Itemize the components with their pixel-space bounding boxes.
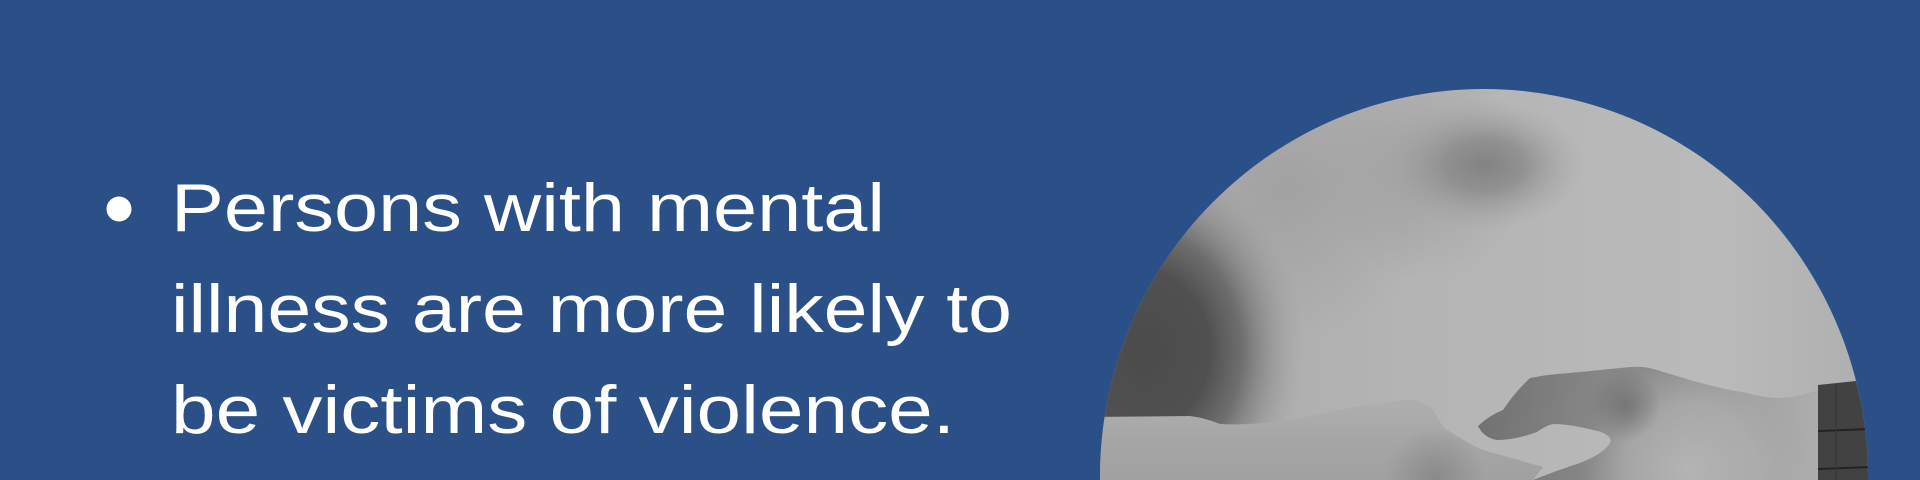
bullet text block — [106, 170, 1012, 448]
bullet dot — [106, 196, 132, 222]
left hand knuckle shading — [1403, 443, 1468, 480]
right knuckle shading — [1604, 384, 1654, 434]
dark shadow left — [1100, 204, 1288, 466]
circular photo: two hands reaching — [1100, 89, 1868, 480]
text line 2: illness are more likely to — [171, 271, 1012, 347]
photo backdrop — [1090, 80, 1880, 480]
right hand — [1470, 360, 1820, 480]
right hand wrist highlight — [1594, 380, 1757, 480]
text line 3: be victims of violence. — [171, 372, 955, 448]
dark blob top — [1424, 116, 1564, 213]
shirt cuff — [1818, 381, 1868, 480]
left hand — [1100, 412, 1543, 480]
haze near top — [1384, 110, 1449, 228]
text line 1: Persons with mental — [171, 170, 885, 246]
haze upper left — [1224, 126, 1344, 252]
